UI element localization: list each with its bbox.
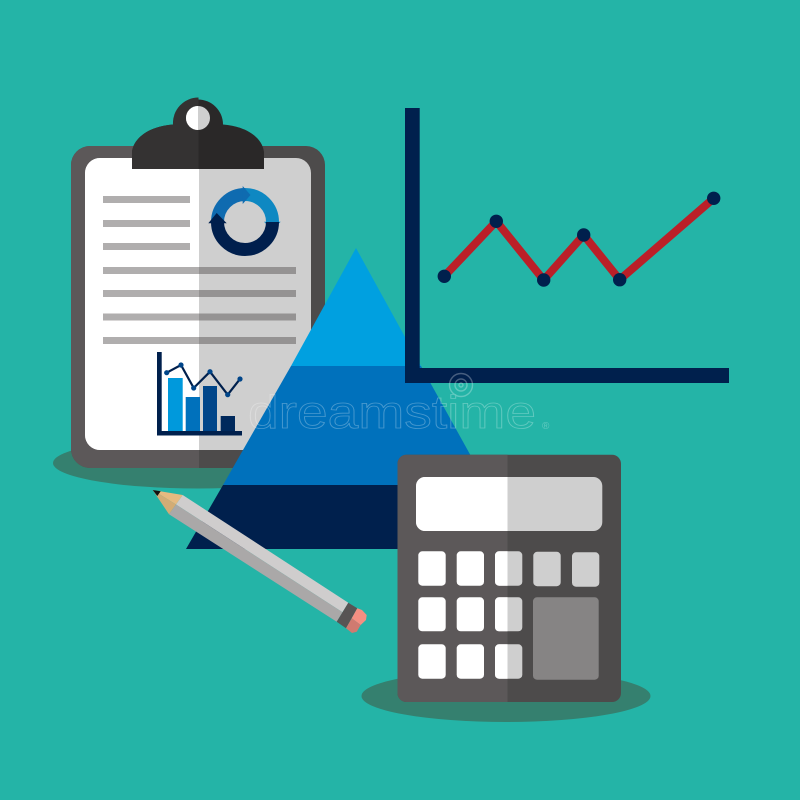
clipboard board xyxy=(71,146,325,468)
watermark registered mark: ® xyxy=(542,421,550,432)
pencil body xyxy=(169,495,348,622)
calculator display xyxy=(416,477,602,531)
text lines on paper xyxy=(103,196,296,344)
icon: cycle arrows xyxy=(208,186,281,250)
clipboard shadow xyxy=(53,438,343,488)
pyramid middle tier xyxy=(223,366,487,485)
clipboard clip xyxy=(132,97,264,169)
calculator body xyxy=(398,455,621,702)
pyramid xyxy=(186,248,520,549)
mini bar and line chart xyxy=(157,352,243,436)
watermark logo xyxy=(450,374,472,396)
clipboard xyxy=(71,97,325,468)
watermark xyxy=(248,374,550,438)
clipboard paper xyxy=(85,158,311,450)
chart axes xyxy=(405,108,729,383)
calculator shadow xyxy=(362,670,650,722)
pencil eraser xyxy=(346,608,367,633)
pencil xyxy=(153,490,367,633)
pyramid top tier xyxy=(291,248,421,366)
chart data points xyxy=(438,192,720,287)
pencil ferrule xyxy=(337,603,357,628)
chart line xyxy=(444,198,714,280)
calculator xyxy=(398,455,621,702)
line chart xyxy=(405,108,729,383)
pyramid bottom tier xyxy=(186,485,520,549)
watermark text: dreamstime xyxy=(248,386,536,438)
pencil wood tip xyxy=(153,490,183,514)
calculator buttons xyxy=(418,551,599,680)
